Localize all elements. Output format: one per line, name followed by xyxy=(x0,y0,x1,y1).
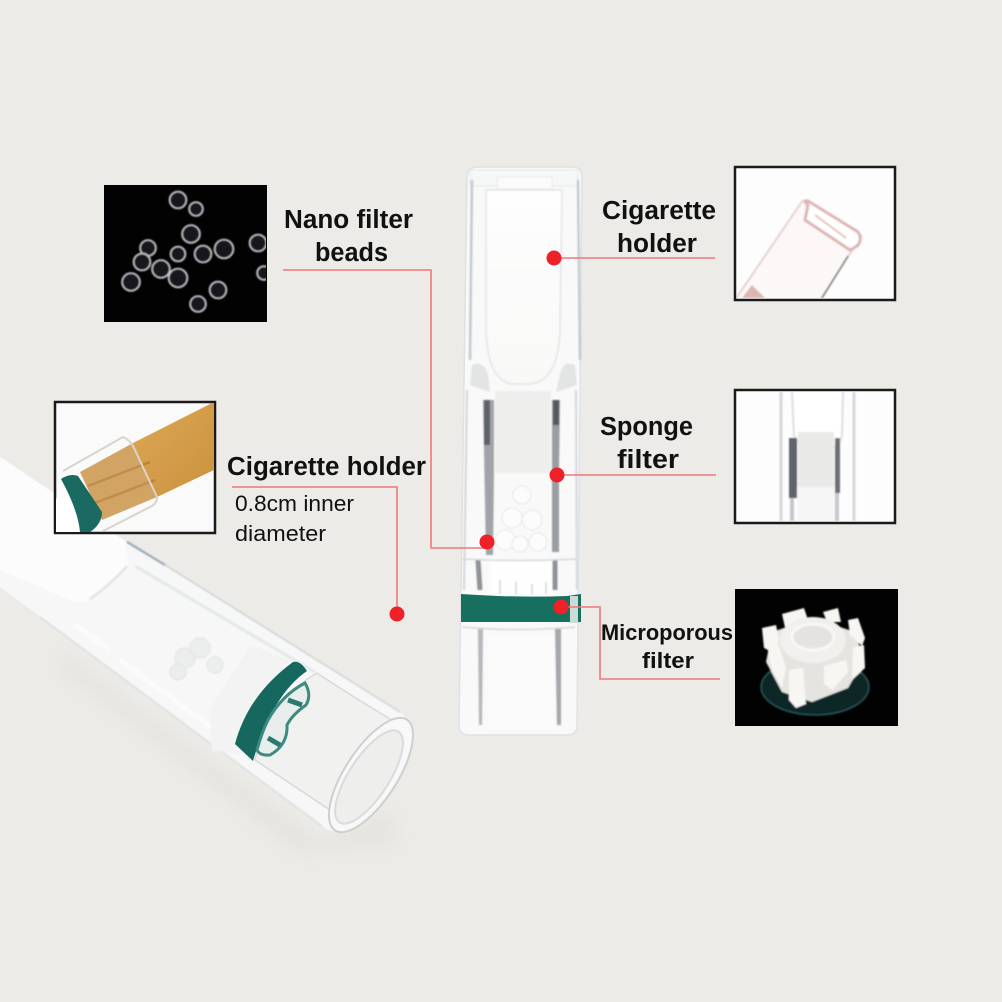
white filter teeth xyxy=(490,560,552,594)
holder shadow xyxy=(60,650,400,855)
label: nano filter beads: beads xyxy=(315,239,388,267)
holder body xyxy=(0,457,409,831)
white filter xyxy=(56,498,80,532)
gear teeth xyxy=(762,608,865,708)
lower stripes xyxy=(478,628,483,725)
label: sponge filter: filter xyxy=(617,446,679,474)
inset: microporous filter close-up xyxy=(735,589,898,726)
label: cigarette holder, left: diameter xyxy=(235,521,326,546)
product photo: angled cigarette holder xyxy=(0,457,429,855)
label: sponge filter xyxy=(600,413,693,474)
product photo: upright cigarette holder xyxy=(459,167,582,735)
base disc xyxy=(761,659,869,715)
inset: nano filter beads xyxy=(104,185,271,322)
label: cigarette holder, top right: Cigarette xyxy=(602,197,716,225)
label: microporous filter: filter xyxy=(642,648,694,673)
green ring xyxy=(61,475,102,532)
green band xyxy=(461,594,581,622)
infographic canvas xyxy=(0,166,898,834)
label: cigarette holder, top right: holder xyxy=(617,230,697,258)
green ring xyxy=(235,662,307,761)
label: sponge filter: Sponge xyxy=(600,413,693,441)
label: cigarette holder, left: 0.8cm inner xyxy=(235,491,354,516)
inset: cigarette holder mouthpiece xyxy=(735,167,895,300)
cigarette xyxy=(133,402,214,497)
sponge xyxy=(495,391,551,473)
open end of tube xyxy=(313,705,429,845)
label: cigarette holder, left xyxy=(227,453,426,546)
callout dots xyxy=(390,250,568,622)
beads xyxy=(170,192,186,208)
holder body xyxy=(459,167,582,735)
beads xyxy=(497,473,550,558)
top ring xyxy=(780,617,846,663)
label: nano filter beads xyxy=(284,206,413,267)
lower tube xyxy=(255,673,400,820)
label: cigarette holder, top right xyxy=(602,197,716,258)
label: microporous filter xyxy=(601,620,733,673)
microporous end seen through tube xyxy=(257,683,309,755)
inset: cigarette in holder xyxy=(55,402,215,533)
tube xyxy=(63,437,157,531)
inset: sponge filter close-up xyxy=(735,390,895,523)
gear body xyxy=(766,618,864,702)
callout lines xyxy=(232,258,720,679)
dark stripes xyxy=(483,400,494,555)
label: microporous filter: Microporous xyxy=(601,620,733,645)
label: cigarette holder, left: Cigarette holder xyxy=(227,453,426,481)
label: nano filter beads: Nano filter xyxy=(284,206,413,234)
top lip xyxy=(470,170,578,186)
nano beads inside holder xyxy=(170,638,223,680)
inner cavity xyxy=(486,190,562,384)
